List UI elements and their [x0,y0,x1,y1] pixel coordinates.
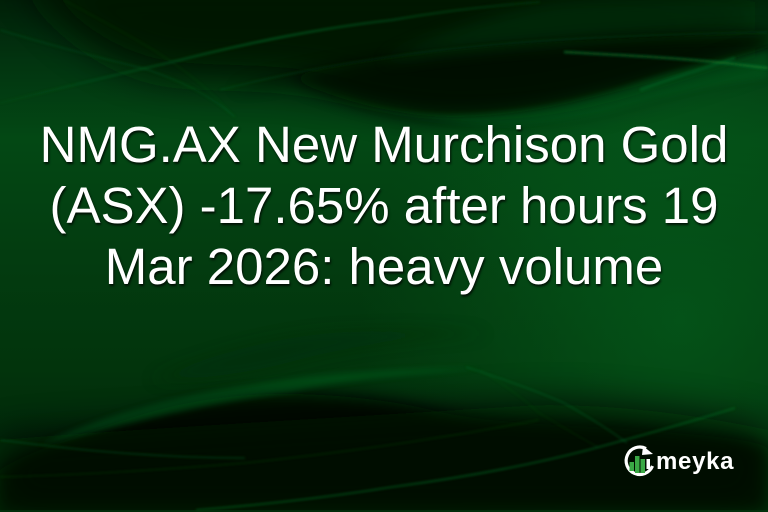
bottom dark hill [0,394,768,512]
title [40,116,728,298]
logo: meyka [624,445,734,476]
wordmark: meyka [656,448,734,475]
icon: circular arrow with bars [624,445,654,476]
title: (ASX) -17.65% after hours 19 [49,177,718,234]
top dark swooshes [20,0,768,107]
title: NMG.AX New Murchison Gold [40,116,728,173]
title: Mar 2026: heavy volume [105,238,663,295]
